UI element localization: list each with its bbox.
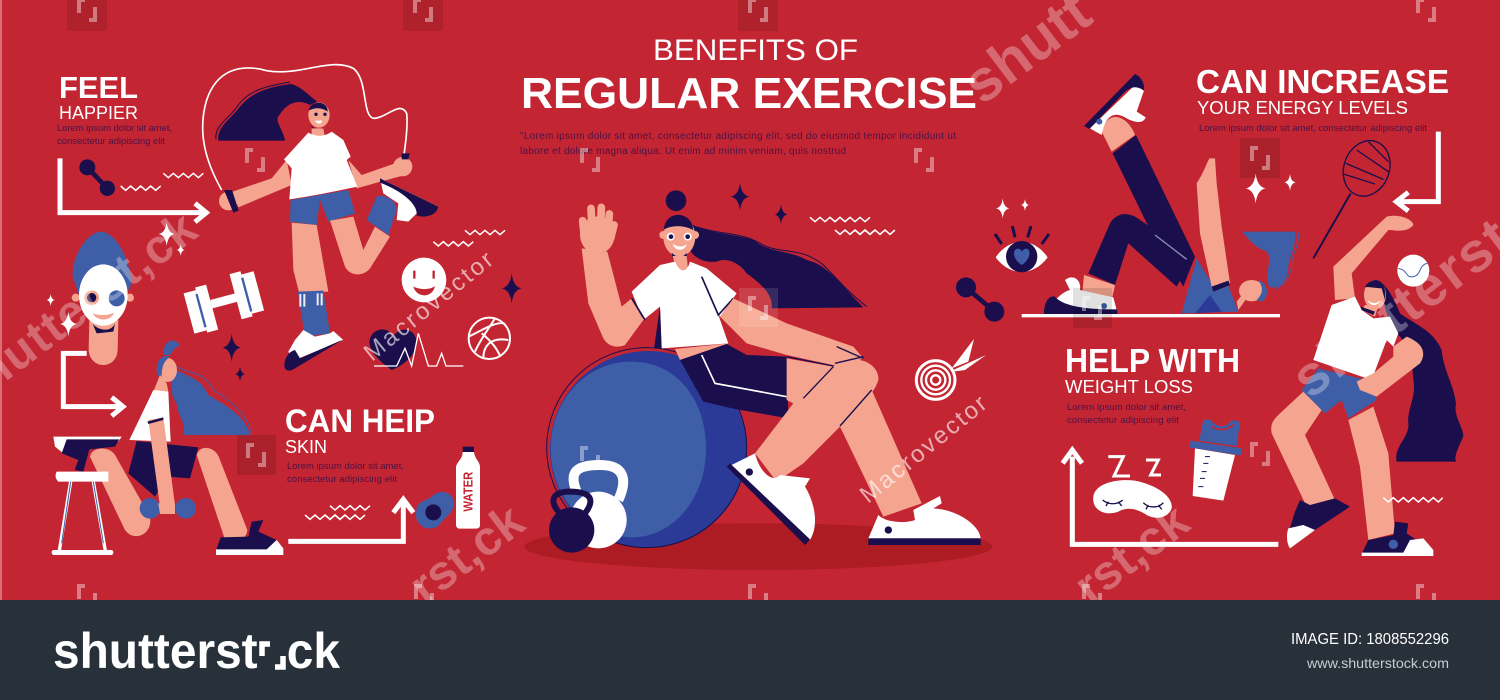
watermark: Macrovector text: Macrovector bbox=[855, 390, 992, 509]
figure: woman with dumbbell bbox=[52, 341, 283, 555]
panel: feel happier heading: consectetur adipiscing elit bbox=[57, 136, 165, 147]
watermark: Macrovector text bbox=[359, 246, 992, 509]
footer image id: www.shutterstock.com bbox=[1306, 655, 1449, 671]
icon: eye with heart bbox=[995, 226, 1049, 272]
panel: help with weight loss heading: Lorem ipsum dolor sit amet, bbox=[1067, 402, 1186, 413]
zigzag decoration bbox=[121, 173, 505, 246]
icon: white dumbbell bbox=[182, 268, 266, 336]
panel: help with weight loss heading: consectetur adipiscing elit bbox=[1067, 415, 1179, 426]
zigzag decoration bbox=[810, 217, 895, 234]
icon: water bottle: WATER bbox=[461, 471, 476, 512]
hair bbox=[697, 227, 867, 307]
skipping rope bbox=[203, 65, 407, 190]
icon: face with mask bbox=[72, 232, 134, 365]
icon: volleyball bbox=[468, 318, 510, 359]
arrow: up to water bbox=[288, 499, 413, 541]
watermark: shutterstock text: rst,ck bbox=[400, 494, 534, 614]
panel: can increase heading bbox=[1196, 63, 1449, 134]
title bbox=[521, 34, 977, 118]
icon: navy sparkles bbox=[731, 183, 788, 224]
figure: woman lying down bbox=[1044, 74, 1299, 314]
icon: avocado bbox=[416, 492, 454, 529]
panel: can help skin heading: CAN HEIP bbox=[285, 403, 435, 439]
title: REGULAR EXERCISE bbox=[521, 69, 977, 118]
panel: can help skin heading: SKIN bbox=[285, 437, 327, 457]
arrow: face to seated woman bbox=[63, 353, 123, 416]
icon: shaker bottle bbox=[1189, 419, 1242, 501]
icon: target with arrow bbox=[916, 339, 986, 399]
zigzag decoration bbox=[1383, 498, 1443, 502]
panel: can help skin illustrations bbox=[52, 341, 480, 555]
panel: central figure bbox=[524, 183, 1004, 570]
arrow: weight loss bbox=[1063, 450, 1278, 544]
panel: can help skin heading: Lorem ipsum dolor sit amet, bbox=[287, 461, 404, 472]
intro text: labore et dolore magna aliqua. Ut enim ad minim veniam, quis nostrud bbox=[520, 146, 846, 157]
icon: kettlebells bbox=[549, 465, 627, 553]
panel: feel happier heading: FEEL bbox=[59, 70, 138, 105]
intro text: "Lorem ipsum dolor sit amet, consectetur adipiscing elit, sed do eiusmod tempor incididunt ut bbox=[520, 131, 956, 142]
panel: can increase illustrations bbox=[995, 74, 1438, 317]
icon: water bottle bbox=[456, 447, 480, 529]
icon: white sparkles bbox=[996, 173, 1296, 218]
floor shadow bbox=[524, 523, 992, 570]
figure: woman skipping bbox=[216, 82, 438, 371]
watermark: logo tiles bbox=[67, 0, 1434, 606]
panel: help with weight loss heading: HELP WITH bbox=[1065, 342, 1240, 379]
arrow: energy bbox=[1396, 132, 1438, 211]
icon: sleep mask bbox=[1093, 480, 1172, 518]
watermark: shutterstock text: rst,ck bbox=[1065, 494, 1199, 614]
panel: can increase heading: CAN INCREASE bbox=[1196, 63, 1449, 100]
footer image id bbox=[1291, 631, 1449, 671]
icon: navy dumbbell right bbox=[956, 277, 1004, 322]
panel: feel happier illustrations bbox=[47, 65, 522, 371]
icon: tennis ball bbox=[1397, 255, 1429, 287]
icon: heart with pulse bbox=[369, 329, 463, 370]
icon: smiley bbox=[402, 258, 446, 302]
footer logo: shutterstock bbox=[53, 623, 340, 679]
panel: help with weight loss heading: WEIGHT LOSS bbox=[1065, 377, 1193, 397]
panel: feel happier heading bbox=[57, 70, 172, 147]
watermark: Macrovector text: Macrovector bbox=[359, 246, 499, 367]
floor line bbox=[1022, 314, 1280, 317]
title: BENEFITS OF bbox=[653, 34, 858, 67]
panel: feel happier heading: Lorem ipsum dolor sit amet, bbox=[57, 123, 172, 134]
exercise ball bbox=[547, 348, 747, 548]
panel: help with weight loss heading bbox=[1065, 342, 1240, 426]
icon: navy dumbbell bbox=[79, 159, 115, 196]
zigzag decoration bbox=[305, 506, 370, 519]
panel: can help skin heading bbox=[285, 403, 435, 485]
panel: help with weight loss illustrations bbox=[1063, 216, 1463, 556]
footer bar bbox=[0, 600, 1500, 700]
figure: woman standing bbox=[1271, 216, 1463, 556]
panel: feel happier heading: HAPPIER bbox=[59, 103, 138, 123]
icon: navy sparkle bbox=[235, 366, 245, 381]
intro text bbox=[520, 131, 956, 157]
icon: racket bbox=[1313, 134, 1398, 258]
footer image id: IMAGE ID: 1808552296 bbox=[1291, 631, 1449, 648]
icon: Z letters bbox=[1108, 457, 1161, 476]
icon: white sparkles bbox=[47, 222, 185, 336]
arrow: feel happier bbox=[60, 158, 206, 222]
figure: woman sitting on ball bbox=[580, 190, 981, 545]
panel: can increase heading: Lorem ipsum dolor sit amet, consectetur adipiscing elit bbox=[1199, 123, 1427, 134]
icon: navy sparkles bbox=[222, 273, 522, 362]
panel: can help skin heading: consectetur adipiscing elit bbox=[287, 474, 397, 485]
panel: can increase heading: YOUR ENERGY LEVELS bbox=[1197, 98, 1408, 118]
